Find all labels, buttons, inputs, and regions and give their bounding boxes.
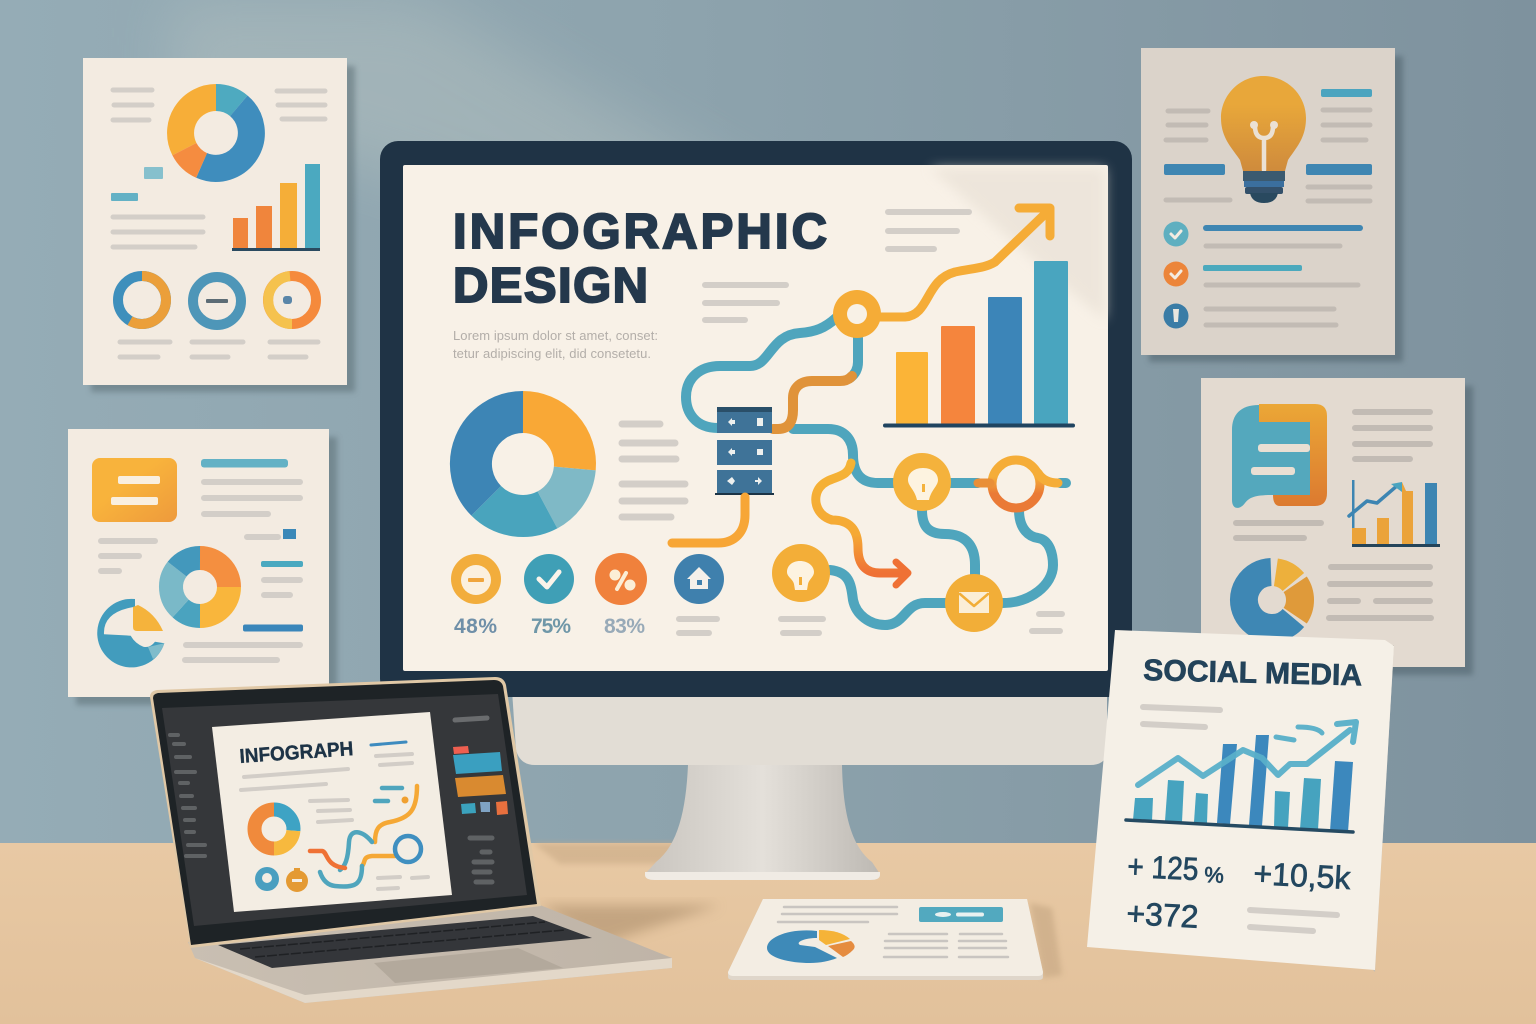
left toolbar marks — [170, 735, 205, 856]
doc text lines — [778, 907, 1008, 957]
monitor chin — [512, 690, 1107, 765]
gray text lines — [679, 212, 1062, 633]
text lines — [101, 482, 300, 660]
right panel swatches — [453, 718, 508, 882]
intro text — [453, 328, 658, 361]
laptop base — [188, 905, 672, 1003]
card stats: +10,5k — [1253, 855, 1352, 896]
lightbulb node — [893, 453, 951, 511]
monitor shadow on desk — [533, 843, 690, 864]
doc label — [919, 907, 1003, 922]
poster: top right lightbulb report — [1141, 48, 1403, 362]
bar chart — [883, 261, 1075, 428]
headline: INFOGRAPHIC — [453, 205, 827, 259]
desk — [0, 843, 1536, 1024]
headline: DESIGN — [453, 259, 648, 313]
yellow flow arrow — [816, 463, 908, 585]
mini bar chart — [1349, 480, 1440, 547]
small legend tags — [111, 167, 163, 201]
donut chart — [171, 558, 229, 616]
card bar chart — [1126, 735, 1353, 832]
orange message box — [92, 458, 177, 522]
stat icons — [451, 553, 647, 605]
social media card — [1087, 630, 1394, 972]
laptop flow lines — [310, 786, 421, 887]
laptop text lines — [371, 742, 406, 745]
monitor screen — [403, 165, 1108, 671]
body text lines — [113, 217, 203, 247]
laptop donut — [254, 810, 293, 848]
laptop icons — [255, 867, 308, 892]
keyboard — [218, 916, 592, 968]
stat values: 83% — [604, 615, 645, 638]
monitor frame — [380, 141, 1132, 697]
screen shadow — [930, 168, 1105, 320]
ring gauges — [118, 276, 316, 325]
pie chart — [1244, 572, 1300, 628]
rising arrow — [880, 208, 1050, 317]
footer text lines — [120, 342, 318, 357]
donut chart — [181, 98, 251, 168]
bar chart — [232, 164, 320, 251]
card text lines — [1143, 707, 1337, 931]
orange line from server — [672, 497, 745, 543]
text lines — [1166, 110, 1370, 325]
card stats: +372 — [1126, 895, 1199, 935]
poster: top left report — [83, 58, 355, 392]
accent bars — [1164, 89, 1372, 271]
orange flow line — [773, 376, 852, 429]
intro text: Lorem ipsum dolor st amet, conset: — [453, 328, 658, 343]
laptop document — [212, 712, 452, 912]
orange circle node — [833, 290, 881, 338]
laptop shadow — [540, 905, 720, 945]
card stats — [1126, 848, 1352, 935]
speech bubble icon — [1232, 404, 1327, 508]
headline — [453, 205, 827, 313]
lightbulb node lower — [772, 544, 830, 602]
laptop lid — [150, 677, 541, 948]
laptop — [150, 677, 720, 1003]
server stack icon — [715, 407, 774, 495]
text lines — [1236, 412, 1431, 618]
card trend arrow — [1138, 722, 1356, 785]
partial pie chart — [97, 599, 164, 667]
poster: right chat report — [1201, 378, 1473, 675]
main donut chart — [471, 412, 575, 516]
card stats: % — [1204, 862, 1224, 888]
desk document — [728, 899, 1062, 980]
ring node — [978, 460, 1058, 508]
app window — [162, 694, 527, 926]
home icon — [674, 554, 724, 604]
header text lines — [113, 90, 325, 120]
trackpad — [374, 948, 563, 983]
doc pie — [767, 930, 855, 963]
accent bars — [201, 459, 303, 632]
mail node — [945, 574, 1003, 632]
card stats: + 125 — [1127, 848, 1199, 887]
stat values — [454, 615, 645, 638]
monitor stand — [645, 765, 880, 880]
stat values: 75% — [531, 615, 571, 638]
wall light beam — [170, 0, 770, 320]
teal flow lines — [686, 318, 1066, 625]
card title: SOCIAL MEDIA — [1143, 654, 1363, 692]
stat values: 48% — [454, 615, 497, 638]
intro text: tetur adipiscing elit, did consetetu. — [453, 346, 651, 361]
laptop headline: INFOGRAPH — [239, 738, 354, 768]
poster: left middle report — [68, 429, 337, 705]
status icons — [1164, 222, 1188, 328]
lightbulb icon — [1221, 76, 1306, 203]
